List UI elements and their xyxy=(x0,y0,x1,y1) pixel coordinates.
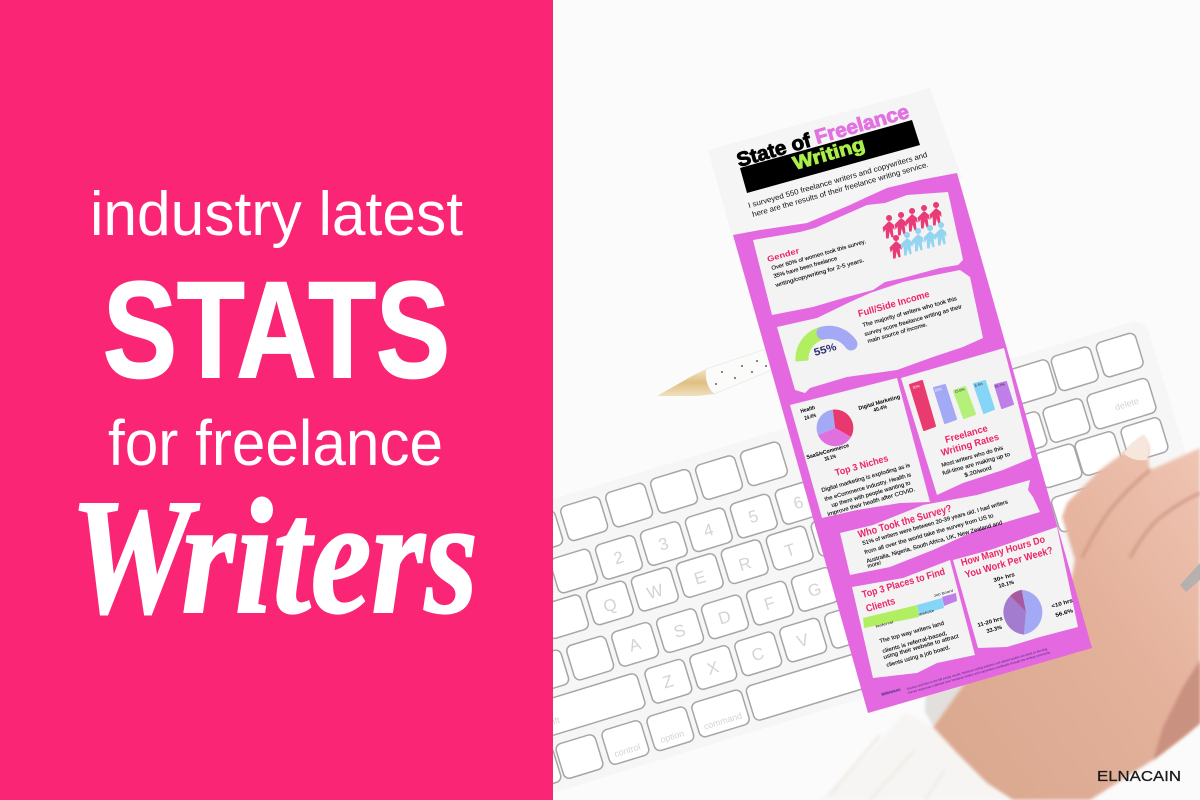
heading: top 3 places: Clients xyxy=(865,596,897,615)
keyboard: R xyxy=(736,553,754,575)
heading: income: Full/Side Income xyxy=(857,289,931,320)
heading: freelance writing rates: Writing Rates xyxy=(940,432,1001,459)
title black bar xyxy=(740,120,920,193)
keyboard: V xyxy=(795,630,812,651)
keyboard: Q xyxy=(601,594,619,616)
pie labels: hours: <10 hrs xyxy=(1051,598,1074,610)
places body text: using their website to attract xyxy=(883,634,960,661)
title: State of Freelance Writing: Writing xyxy=(791,134,868,175)
bar labels xyxy=(912,382,1006,394)
pie labels: niches: 24.4% xyxy=(804,413,817,422)
pie labels: hours: 10.1% xyxy=(998,580,1015,590)
title: State of Freelance Writing xyxy=(734,101,920,193)
stacked bar labels: Referral xyxy=(875,620,894,629)
heading: who took the survey: Who Took the Survey? xyxy=(857,503,953,541)
pie labels: hours: 33.3% xyxy=(986,625,1003,635)
keyboard: 6 xyxy=(791,492,806,513)
bar labels: 16.7% xyxy=(994,382,1006,389)
pie labels: niches: Digital Marketing xyxy=(858,394,901,412)
finger creases xyxy=(1082,470,1200,558)
panel: gender xyxy=(753,192,963,315)
keyboard: 3 xyxy=(656,534,671,555)
panel: top 3 places to find clients xyxy=(852,560,975,678)
gender body text: Over 60% of women took this survey. xyxy=(771,239,867,272)
references footer: References: xyxy=(881,687,902,697)
bar labels: 30% xyxy=(912,384,921,390)
niches body text: up there with people wanting to xyxy=(831,481,911,509)
keyboard: control xyxy=(613,742,642,759)
bar chart: rates xyxy=(910,381,1013,430)
income body text: survey score freelance writing as their xyxy=(864,304,963,338)
keyboard: 5 xyxy=(746,506,761,527)
income body text: The majority of writers who took this xyxy=(862,296,958,329)
keyboard: F xyxy=(762,593,777,614)
heading: top 3 niches: Top 3 Niches xyxy=(834,453,890,479)
keyboard: S xyxy=(672,621,688,642)
ring xyxy=(1180,563,1200,592)
keyboard: E xyxy=(692,567,708,589)
text: STATS: STATS xyxy=(103,254,450,407)
intro text: here are the results of their freelance writing service. xyxy=(751,160,929,219)
niches body text: the eCommerce industry. Health is xyxy=(824,472,912,503)
infographic xyxy=(708,88,1092,713)
stacked bar labels: Website xyxy=(918,609,935,617)
panel: top 3 niches xyxy=(790,378,930,518)
intro text: I surveyed 550 freelance writers and copywriters and xyxy=(747,150,928,210)
references footer: Sources and links to the full survey results, freelance writing statistics and related studies are listed on the blog xyxy=(906,647,1048,691)
rates body text xyxy=(941,445,1011,479)
keyboard: shift xyxy=(542,715,562,729)
gender body text: 35% have been freelance xyxy=(773,256,838,280)
places body text: clients is referral-based, xyxy=(882,631,948,655)
heading: hours per week: How Many Hours Do xyxy=(960,534,1046,569)
panel: full/side income xyxy=(777,270,983,393)
text: Writers: Writers xyxy=(70,465,478,648)
pie chart: hours xyxy=(1003,590,1042,635)
rates body text: $.20/word xyxy=(964,465,992,479)
keyboard: T xyxy=(782,540,798,561)
fingernail xyxy=(1124,435,1148,460)
panel: pink title block xyxy=(0,0,553,800)
keyboard xyxy=(413,318,1200,800)
pink torn background xyxy=(733,173,1092,713)
lower hand shadow xyxy=(1153,660,1200,760)
survey body text: more! xyxy=(867,560,882,570)
rates body text: full-time are making up to xyxy=(942,452,1011,477)
heading: top 3 places: Top 3 Places to Find xyxy=(861,567,946,601)
survey body text: 51% of writers were between 20-39 years old. I had writers xyxy=(862,499,1009,547)
pie labels: hours: 30+ hrs xyxy=(993,572,1016,584)
gauge chart: 55%: 55% xyxy=(813,341,839,359)
pie labels: niches xyxy=(800,394,901,463)
keyboard: option xyxy=(659,728,685,745)
survey body text: from all over the world take the survey from US to xyxy=(864,513,994,556)
gender body text: writing/copywriting for 2-5 years. xyxy=(774,258,865,289)
places body text: clients using a job board. xyxy=(886,645,951,669)
keyboard: D xyxy=(716,607,733,628)
panel: hours per week xyxy=(953,527,1078,648)
pie chart: niches xyxy=(817,409,853,446)
bar labels: 8.4% xyxy=(974,382,984,388)
text: for freelance: for freelance xyxy=(108,407,443,479)
keyboard: A xyxy=(627,634,644,656)
keyboard: C xyxy=(749,644,767,665)
stacked bar labels xyxy=(875,589,954,629)
references footer: Survey responses collected from freelance writers and copywriters worldwide through the writing community xyxy=(907,650,1051,695)
heading: hours per week: You Work Per Week? xyxy=(964,545,1054,581)
title: State of Freelance Writing: Freelance xyxy=(812,101,912,149)
heading: gender: Gender xyxy=(766,246,800,264)
stacked bar labels: Job Board xyxy=(933,589,954,598)
pie labels: hours xyxy=(977,572,1074,635)
niches body text: Digital marketing is exploding as is xyxy=(821,463,911,494)
survey body text xyxy=(862,499,1009,570)
bar labels: 20% xyxy=(934,387,943,393)
keyboard: delete xyxy=(1114,396,1140,412)
keyboard: Z xyxy=(660,671,676,693)
keyboard: command xyxy=(703,711,743,732)
places body text xyxy=(879,621,960,669)
sleeve xyxy=(820,680,1012,800)
pie labels: niches: 40.4% xyxy=(873,404,888,414)
gauge chart: 55% xyxy=(802,332,851,361)
pie labels: niches: 35.1% xyxy=(824,454,837,463)
hand xyxy=(933,435,1200,800)
pie labels: niches: SaaS/eCommerce xyxy=(806,443,850,461)
pie labels: hours: 56.6% xyxy=(1055,608,1074,619)
income body text: main source of income. xyxy=(867,322,929,345)
paper header xyxy=(708,88,962,240)
rates body text: Most writers who do this xyxy=(941,445,1004,469)
keyboard: 4 xyxy=(701,520,716,541)
keyboard: 2 xyxy=(611,547,626,568)
panel: freelance writing rates xyxy=(901,348,1032,495)
keyboard: W xyxy=(645,580,666,603)
icon: people row xyxy=(883,202,947,258)
text: industry latest: industry latest xyxy=(90,180,463,249)
brand: ELNACAIN: ELNACAIN xyxy=(1097,769,1181,785)
places body text: The top way writers land xyxy=(879,621,945,645)
keyboard: G xyxy=(805,579,824,601)
pen xyxy=(657,346,781,396)
income body text xyxy=(862,296,963,345)
gender body text xyxy=(771,239,867,289)
bar labels: 15.6% xyxy=(954,387,966,394)
pie labels: hours: 11-20 hrs xyxy=(977,616,1004,629)
heading: freelance writing rates: Freelance xyxy=(944,423,989,446)
survey body text: Australia, Nigeria, South Africa, UK, New Zealand and xyxy=(866,520,1003,565)
niches body text xyxy=(821,463,916,518)
heading: top 3 places xyxy=(861,567,946,615)
niches body text: improve their health after COVID. xyxy=(827,487,916,518)
pie labels: niches: Health xyxy=(800,405,817,415)
stacked bar chart: places xyxy=(863,593,957,628)
keyboard: X xyxy=(705,657,721,679)
panel: who took the survey xyxy=(840,480,1040,575)
title: State of Freelance Writing: State of xyxy=(734,130,814,172)
